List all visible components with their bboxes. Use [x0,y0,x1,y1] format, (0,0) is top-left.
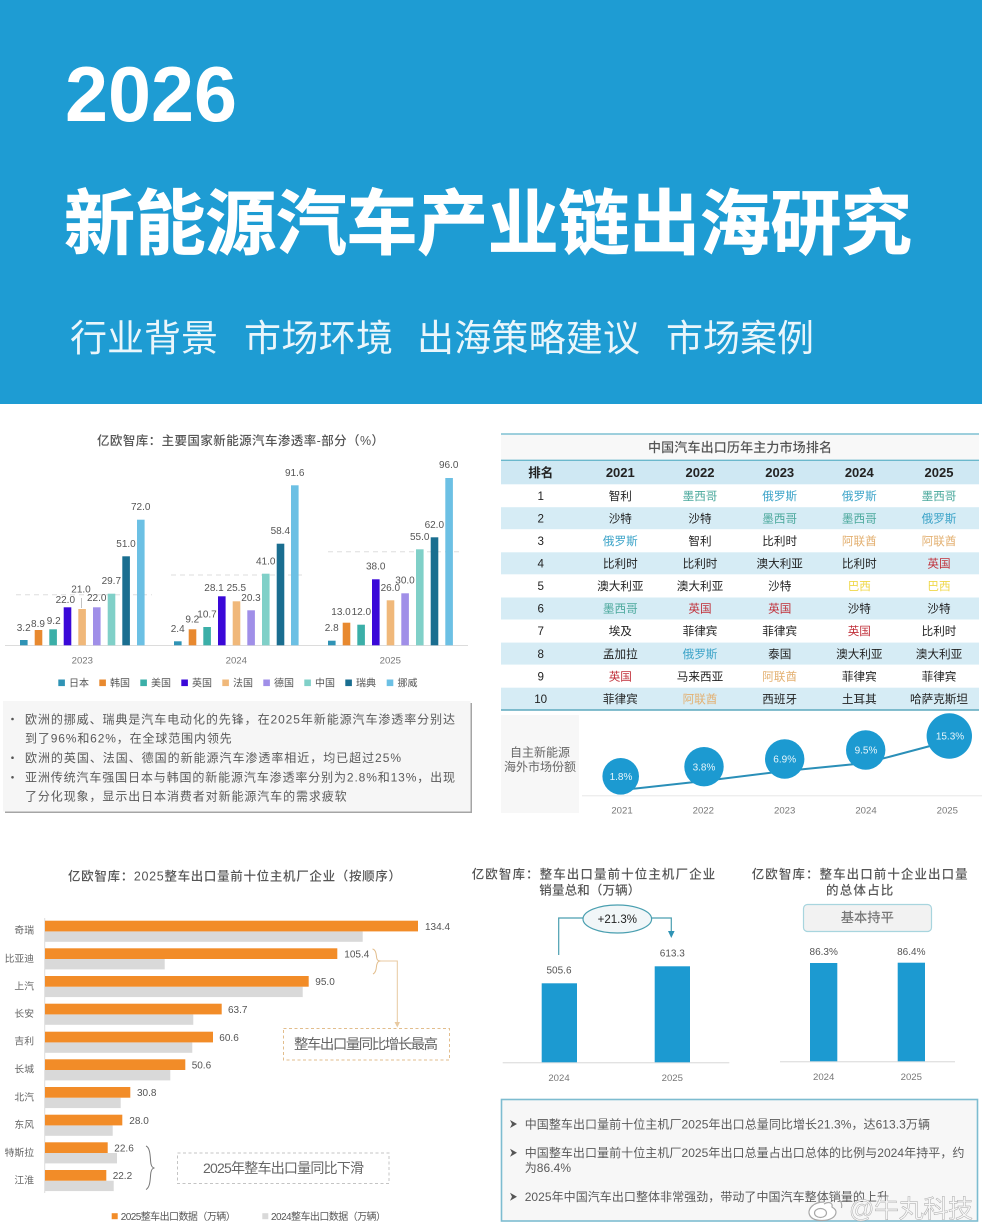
table rows: 埃及 [609,624,632,638]
table rows: 孟加拉 [603,647,638,661]
bars 2023: 22.0 [56,595,75,606]
company labels: 上汽 [14,979,34,992]
table rows: 澳大利亚 [677,579,724,593]
watermark: @牛丸科技 [849,1196,973,1224]
bar values: 86.3% [810,947,838,958]
bars 2024: 91.6 [285,468,305,479]
bars 2024: 41.0 [256,556,276,568]
bars 2025 [325,460,459,645]
callout: summary box: 中国整车出口量前十位主机厂2025年出口总量占出口总体的比例与2024年持平，约 [525,1145,964,1160]
years: 2024 [548,1073,570,1084]
bars 2023: 72.0 [131,502,151,513]
table rows: 俄罗斯 [762,490,797,503]
table rows: 6 [537,603,544,616]
table rows: 澳大利亚 [757,556,803,570]
company labels: 长安 [14,1007,34,1020]
table rows: 菲律宾 [762,624,797,638]
side label: 海外市场份额 [504,759,576,774]
bar values: 613.3 [660,948,685,960]
company labels: 奇瑞 [14,924,34,937]
years [548,1073,683,1084]
table rows: 智利 [609,489,632,503]
value labels: 60.6 [219,1033,239,1044]
subtitle topics: 市场环境 [244,318,393,359]
bars 2025: 62.0 [425,520,444,531]
bars 2023: 9.2 [47,616,61,627]
company labels [5,924,34,1187]
flat badge [804,904,932,932]
value labels: 134.4 [425,922,450,933]
chart legend: 瑞典 [356,676,376,690]
side label [504,744,576,774]
subtitle topics: 行业背景 [70,318,218,359]
bars 2025: 96.0 [439,460,459,471]
share bubbles [602,713,972,795]
subtitle topics: 出海策略建议 [417,318,640,359]
bar values: 505.6 [546,966,572,976]
table rows: 沙特 [927,602,951,616]
table rows: 泰国 [768,647,791,661]
table rows: 墨西哥 [683,490,717,503]
panel: top ten share of exports [752,866,968,1083]
table rows: 阿联酋 [842,534,877,548]
value labels: 95.0 [315,977,335,988]
callout: penetration notes: 欧洲的英国、法国、德国的新能源汽车渗透率相近，均已超过25% [25,750,401,765]
table rows: 比利时 [603,558,638,570]
bars 2023: 29.7 [102,576,121,587]
arrow: growth: +21.3% [598,914,637,926]
callout: penetration notes: 亚洲传统汽车强国日本与韩国的新能源汽车渗透率分别为2.8%和13%，出现 [25,770,455,785]
bars 2025: 2.8 [325,623,339,634]
table header row [528,465,953,480]
panel: overseas share line chart [501,713,982,816]
table rows: 俄罗斯 [842,490,877,503]
years [611,806,958,816]
share bubbles: 15.3% [936,732,964,742]
table header row: 2023 [765,465,794,480]
table rows: 巴西 [927,580,951,593]
table rows: 7 [537,625,544,638]
table rows: 菲律宾 [842,669,877,683]
bars 2023: 51.0 [116,539,136,550]
value labels: 22.6 [114,1144,134,1154]
value labels [113,922,450,1182]
table rows: 比利时 [922,625,957,638]
table rows: 8 [537,648,544,661]
bars 2025: 38.0 [366,562,386,572]
bars 2024: 58.4 [271,526,290,537]
table rows: 墨西哥 [922,490,956,503]
bar values [810,947,926,958]
table header row: 2022 [686,465,714,480]
share bubbles: 1.8% [610,772,633,783]
chart legend: 挪威 [398,676,418,690]
table header row: 2021 [606,465,635,480]
table rows: 英国 [688,602,712,616]
grey bars 2024 [45,931,363,1191]
bar values: 86.4% [897,947,926,958]
callout: declining exports [146,1146,389,1190]
years: 2024 [855,806,877,816]
bars 2025: 26.0 [381,583,400,594]
table title: 中国汽车出口历年主力市场排名 [648,440,832,455]
bars 2024: 20.3 [241,593,261,604]
company labels: 北汽 [14,1090,34,1103]
chart title: 亿欧智库：主要国家新能源汽车渗透率-部分（%） [97,433,384,448]
table header row: 排名 [528,465,553,480]
share bubbles: 3.8% [693,762,716,774]
panel: export market ranking table [501,434,979,710]
chart legend: 法国 [233,676,253,690]
company labels: 江淮 [14,1175,34,1187]
subtitle topics: 市场案例 [666,318,814,359]
table rows: 巴西 [848,580,871,593]
callout: summary box: 2025年中国汽车出口整体非常强劲，带动了中国汽车整体销量的上升 [525,1189,889,1204]
table rows [534,489,968,706]
table rows: 沙特 [609,511,632,525]
table rows: 英国 [768,602,791,616]
chart legend: 美国 [151,676,171,690]
orange bars 2025 [45,921,418,1181]
bars 2025: 13.0 [331,607,351,618]
table rows: 10 [534,693,547,706]
company labels: 长城 [14,1063,34,1075]
panel: penetration rate chart [5,433,468,690]
table rows: 沙特 [848,602,871,616]
table rows: 5 [537,580,544,593]
chart legend: 德国 [274,676,294,690]
bars 2024: 25.5 [227,583,246,594]
years: 2025 [937,806,958,816]
table rows: 墨西哥 [603,603,638,616]
table rows: 9 [537,670,544,683]
legend: 2025整车出口数据（万辆） [121,1210,236,1223]
side label: 自主新能源 [510,744,570,760]
value labels: 22.2 [113,1171,133,1182]
table rows: 3 [537,535,544,548]
bars 2023: 21.0 [71,584,91,596]
chart title: 销量总和（万辆） [539,882,640,898]
chart title: 的总体占比 [826,882,893,898]
table rows: 阿联酋 [683,692,717,706]
table rows: 2 [537,512,544,525]
value labels: 28.0 [129,1116,149,1127]
table rows: 沙特 [688,511,712,525]
year axis labels: 2024 [226,656,248,666]
table rows: 俄罗斯 [603,535,638,548]
subtitle topics [70,318,814,359]
value labels: 63.7 [228,1005,248,1016]
callout: summary box: 中国整车出口量前十位主机厂2025年出口总量同比增长21.3%，达613.3万辆 [525,1116,930,1131]
table rows: 英国 [609,669,632,683]
header banner [0,0,982,404]
callout: penetration notes: 欧洲的挪威、瑞典是汽车电动化的先锋，在2025年新能源汽车渗透率分别达 [25,711,455,726]
table rows: 墨西哥 [762,512,797,525]
table rows: 墨西哥 [842,512,877,525]
chart legend [58,676,418,690]
callout: highest growth [284,949,450,1060]
table rows: 马来西亚 [677,670,724,683]
chart title: 亿欧智库：整车出口前十企业出口量 [752,866,968,882]
table rows: 比利时 [842,558,877,570]
heading: year: 2026 [65,50,237,138]
chart title [752,866,968,898]
bars 2024: 10.7 [197,610,217,620]
table rows: 1 [537,490,544,503]
heading: main title: 新能源汽车产业链出海研究 [64,186,912,264]
table rows: 俄罗斯 [683,648,718,661]
table rows: 哈萨克斯坦 [910,692,968,706]
panel: top ten OEM export bar chart [5,868,450,1223]
bars 2024 [171,468,305,645]
table rows: 澳大利亚 [916,647,963,661]
table rows: 俄罗斯 [922,512,957,525]
bars 2025: 12.0 [352,607,371,618]
table rows: 菲律宾 [683,624,717,638]
company labels: 比亚迪 [5,953,34,965]
chart legend: 中国 [315,676,335,690]
bars 2024: 2.4 [171,624,185,635]
years: 2025 [662,1073,683,1084]
chart title: 亿欧智库：2025整车出口量前十位主机厂企业（按顺序） [68,868,401,884]
callout: penetration notes: 了分化现象，显示出日本消费者对新能源汽车的需求疲软 [25,789,347,804]
years: 2021 [611,806,633,816]
bars 2025: 55.0 [410,532,430,543]
flat badge: 基本持平 [841,909,894,925]
years: 2024 [813,1072,835,1083]
bars 2023 [17,502,151,645]
callout: highest growth: 整车出口量同比增长最高 [294,1036,438,1053]
bars [810,963,925,1061]
chart legend: 日本 [69,676,89,690]
bars 2023: 8.9 [31,619,45,630]
arrow: growth [559,905,675,955]
legend [112,1210,386,1223]
share bubbles: 6.9% [773,754,796,766]
callout: declining exports: 2025年整车出口量同比下滑 [203,1160,364,1176]
table header row: 2024 [845,465,875,480]
table rows: 土耳其 [842,693,877,706]
company labels: 吉利 [14,1036,34,1048]
table header row: 2025 [925,465,953,480]
bars 2024: 9.2 [185,614,200,626]
bar values [546,948,685,976]
table rows: 阿联酋 [922,534,956,548]
bars 2023: 22.0 [87,593,107,604]
bars 2023: 3.2 [17,623,31,634]
table rows: 4 [537,558,544,570]
years: 2022 [693,806,714,816]
chart legend: 韩国 [110,676,130,690]
years: 2025 [901,1072,922,1083]
share bubbles: 9.5% [855,746,878,756]
table rows: 西班牙 [762,693,797,706]
legend: 2024整车出口数据（万辆） [271,1210,386,1223]
year axis labels [72,656,401,666]
year axis labels: 2023 [72,656,93,666]
table rows: 比利时 [683,558,718,570]
callout: summary box [502,1100,978,1221]
years: 2023 [774,806,795,816]
year axis labels: 2025 [380,656,401,666]
bars [542,966,690,1062]
panel: top ten total sales [472,866,729,1084]
table rows: 英国 [927,556,951,570]
chart title [472,866,715,898]
table rows: 澳大利亚 [836,647,883,661]
table rows: 英国 [848,624,871,638]
table rows: 菲律宾 [922,669,956,683]
callout: penetration notes: 到了96%和62%，在全球范围内领先 [25,731,232,746]
table rows: 菲律宾 [603,692,638,706]
company labels: 特斯拉 [5,1146,34,1159]
bars 2024: 28.1 [204,583,224,594]
bars 2025: 30.0 [395,576,415,586]
value labels: 30.8 [137,1088,157,1099]
table rows: 澳大利亚 [597,579,644,593]
years [813,1072,922,1083]
value labels: 50.6 [192,1060,212,1072]
table rows: 智利 [688,534,712,548]
callout: summary box: 为86.4% [525,1161,571,1175]
value labels: 105.4 [344,950,370,960]
company labels: 东风 [14,1118,34,1131]
table rows: 沙特 [768,579,792,593]
table rows: 比利时 [762,535,797,548]
chart title: 亿欧智库：整车出口量前十位主机厂企业 [472,866,715,882]
callout: penetration notes [3,701,472,813]
table rows: 阿联酋 [762,669,797,683]
chart legend: 英国 [192,676,212,690]
